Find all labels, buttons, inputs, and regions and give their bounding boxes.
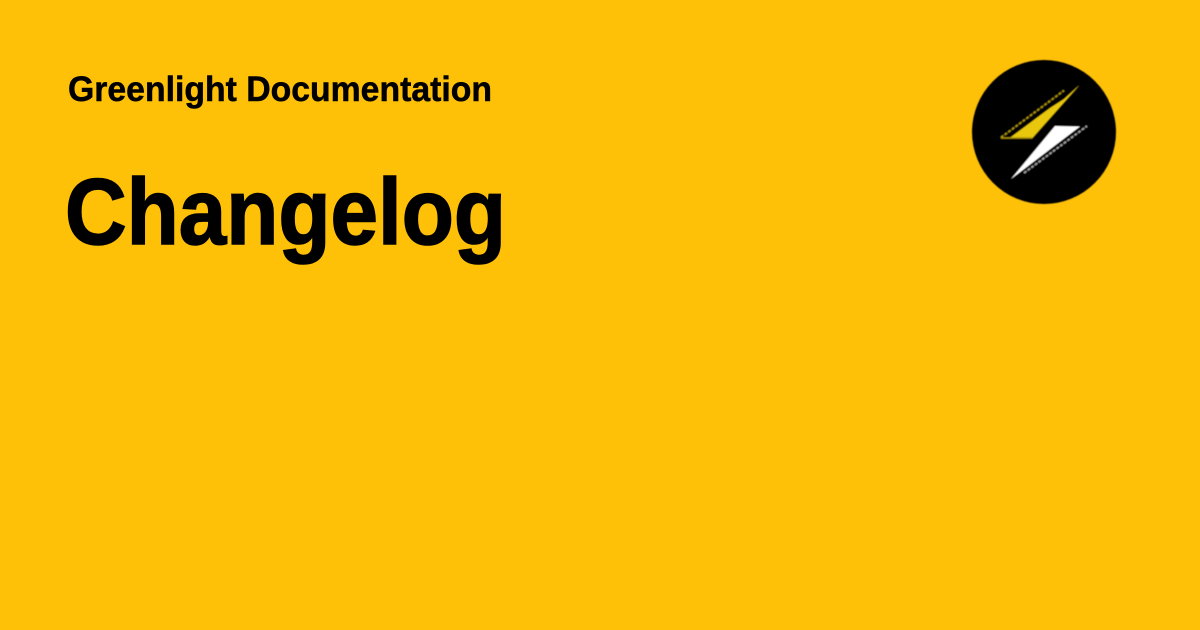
- icon: lightning bolt logo: [972, 60, 1116, 204]
- page title: Changelog: [65, 159, 506, 264]
- site name heading: Greenlight Documentation: [68, 70, 492, 109]
